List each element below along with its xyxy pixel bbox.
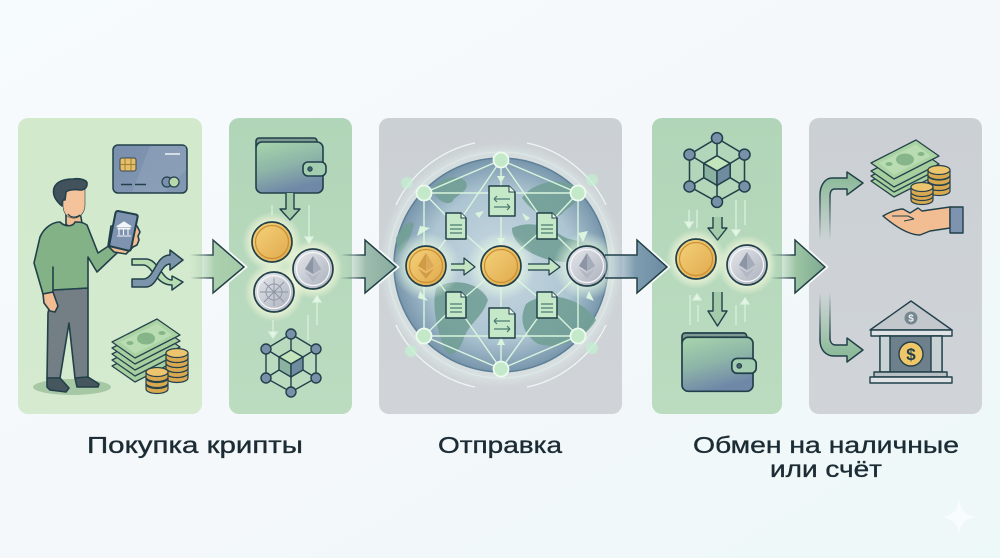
arrow: down to bank xyxy=(820,292,863,362)
icon: sparkle watermark xyxy=(942,500,976,534)
icon: glowing coins xyxy=(666,229,777,295)
panel: sending over global network xyxy=(379,118,622,414)
panel: wallet to coins xyxy=(229,118,352,414)
caption: exchange: Обмен на наличные xyxy=(693,432,959,458)
panel: buying crypto xyxy=(18,118,202,414)
icon: bank: $ xyxy=(908,314,914,324)
icon: glowing coins xyxy=(242,212,343,322)
panel: exchange coins xyxy=(652,118,782,414)
icon: shuffle arrows xyxy=(132,250,183,290)
faint flow arrows xyxy=(269,205,321,340)
icon: blockchain cube xyxy=(261,329,321,397)
globe with network xyxy=(383,143,621,387)
caption: exchange: или счёт xyxy=(770,456,883,482)
icon: phone with bank xyxy=(109,211,138,251)
continents xyxy=(396,177,606,354)
icon: arrow from wallet xyxy=(280,193,300,220)
faint flow arrows xyxy=(685,200,749,325)
icon: open hand xyxy=(883,207,963,235)
icon: wallet xyxy=(682,333,756,391)
arrow: step 4 to 5 xyxy=(770,240,825,293)
arrow: step 1 to 2 xyxy=(190,240,244,293)
arrow: step 2 to 3 xyxy=(340,240,396,293)
icon: arrow to wallet xyxy=(708,292,727,326)
caption: exchange xyxy=(693,432,959,482)
icon: wallet xyxy=(256,138,326,193)
figure: person with phone xyxy=(33,179,140,395)
small transfer arrows xyxy=(451,258,560,275)
coins on the transfer line xyxy=(392,232,621,300)
glowing nodes xyxy=(401,152,598,376)
caption: sending: Отправка xyxy=(438,432,562,458)
network lines xyxy=(424,160,587,369)
documents xyxy=(446,186,557,338)
icon: bank: $ xyxy=(906,345,916,364)
icon: arrow to coins xyxy=(708,217,727,240)
arrow: step 3 to 4 xyxy=(605,240,667,293)
arrow: up to cash xyxy=(820,172,863,240)
caption: buying crypto: Покупка крипты xyxy=(87,432,303,458)
icon: blockchain cube xyxy=(684,133,750,207)
icon: cash and coins xyxy=(112,319,188,394)
panel: cash or account xyxy=(809,118,982,414)
icon: bank xyxy=(870,301,952,383)
icon: bank card xyxy=(113,145,187,193)
icon: cash and coins xyxy=(871,140,950,204)
